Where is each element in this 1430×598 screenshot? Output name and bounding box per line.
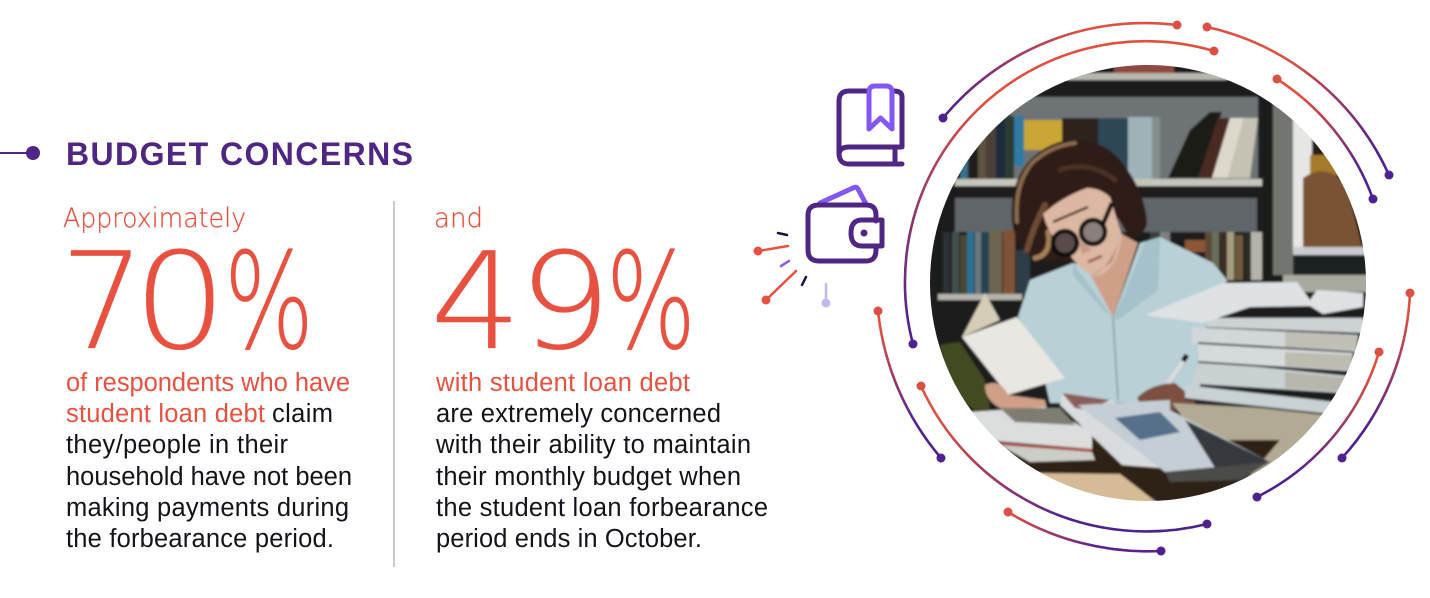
arc: lower left short — [874, 306, 946, 462]
shelves and wall — [1010, 97, 1258, 179]
bottom left books — [968, 407, 1095, 462]
table — [1014, 438, 1280, 500]
description: claim — [272, 400, 333, 428]
intro word: and — [434, 203, 483, 234]
description: household have not been — [66, 463, 352, 491]
big number 70% — [60, 224, 314, 380]
big number 49%: % — [606, 224, 696, 380]
hair highlights — [1017, 143, 1115, 258]
intro word: Approximately — [63, 203, 246, 234]
big number 70%: 0 — [133, 224, 227, 380]
arc: upper left inner — [905, 41, 1218, 348]
big number 70%: % — [224, 224, 314, 380]
big number 70%: 7 — [60, 224, 145, 380]
description: they/people in their — [66, 431, 288, 459]
icon: wallet — [808, 187, 882, 261]
big number 49%: 4 — [430, 224, 522, 380]
heading: BUDGET CONCERNS — [66, 136, 413, 172]
neck — [1088, 232, 1138, 317]
big number 49%: 9 — [518, 224, 612, 380]
description: making payments during — [66, 494, 349, 522]
arc: lower right inner — [1252, 348, 1384, 502]
description: of respondents who have — [66, 369, 350, 397]
open book in hand — [962, 293, 1065, 395]
description: the forbearance period. — [66, 525, 334, 553]
description: the student loan forbearance — [436, 494, 768, 522]
arc: bottom outer — [1004, 508, 1166, 556]
description: their monthly budget when — [436, 463, 741, 491]
hands — [985, 355, 1195, 410]
panel: 49% statistic — [430, 203, 768, 553]
panel: 70% statistic — [60, 203, 352, 553]
center tilted books — [1060, 393, 1270, 482]
description — [435, 369, 768, 553]
glasses — [1053, 203, 1112, 255]
big number 49% — [430, 224, 696, 380]
icon: book — [839, 86, 902, 164]
description: student loan debt — [66, 400, 265, 428]
lower books — [943, 230, 1262, 294]
plant — [940, 342, 990, 410]
arc: upper right inner — [1272, 74, 1378, 204]
hair — [1012, 140, 1147, 261]
arc: upper right outer — [1202, 22, 1394, 180]
icon: burst lines — [754, 233, 830, 308]
description: with student loan debt — [435, 369, 690, 397]
photo: student reading among books — [930, 65, 1366, 501]
arc: lower right outer — [1338, 288, 1414, 462]
arc: lower long — [916, 382, 1212, 531]
right stack of books — [1145, 282, 1363, 480]
upper books — [960, 112, 1258, 179]
description: are extremely concerned — [436, 400, 721, 428]
face — [1043, 188, 1122, 275]
decorative arcs — [874, 20, 1414, 556]
arc: upper left outer — [938, 20, 1182, 122]
shirt — [1018, 237, 1227, 403]
description — [66, 369, 352, 553]
description: with their ability to maintain — [435, 431, 751, 459]
description: period ends in October. — [436, 525, 702, 553]
section marker — [0, 146, 40, 160]
